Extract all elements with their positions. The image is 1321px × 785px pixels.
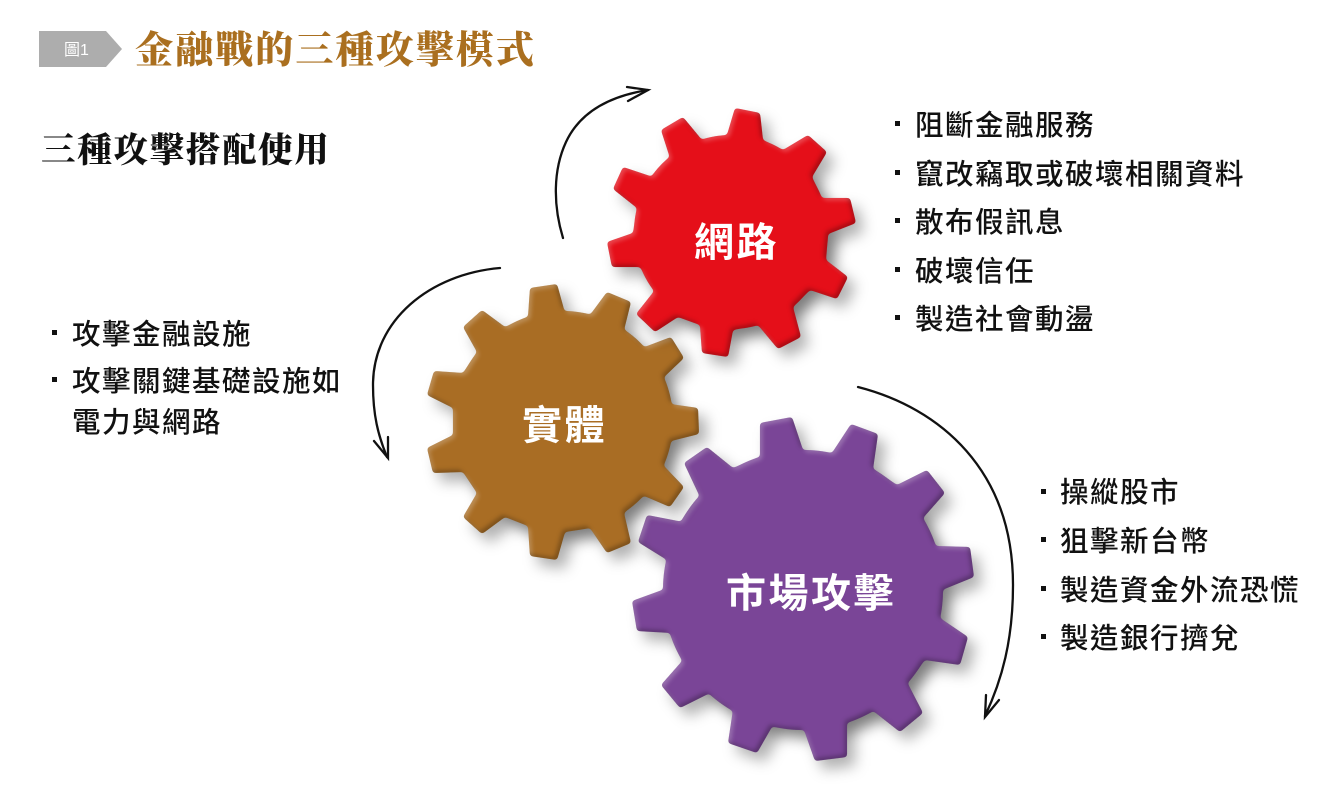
arrow: 網路 to 市場攻擊 <box>858 387 1013 717</box>
list: 實體: 攻擊關鍵基礎設施如 <box>72 366 342 398</box>
list: 網路: 阻斷金融服務 <box>915 110 1095 142</box>
list: 實體: 攻擊金融設施 <box>72 319 252 351</box>
list: 網路 <box>895 110 1245 336</box>
gear: 實體 <box>427 284 707 569</box>
title: 金融戰的三種攻擊模式 <box>135 30 536 72</box>
list: 市場攻擊: 狙擊新台幣 <box>1060 526 1210 558</box>
gear: 網路: 網路 <box>694 221 779 265</box>
list: 市場攻擊: 製造銀行擠兌 <box>1060 623 1240 655</box>
gear: 市場攻擊 <box>632 417 982 770</box>
list: 網路: 製造社會動盪 <box>915 304 1095 336</box>
figure tag: 圖1 <box>39 31 122 67</box>
gear: 市場攻擊: 市場攻擊 <box>726 572 896 616</box>
list: 網路: 散布假訊息 <box>915 207 1065 239</box>
figure tag: 圖1: 圖1 <box>64 42 89 59</box>
list: 網路: 破壞信任 <box>915 256 1035 288</box>
list: 市場攻擊: 操縱股市 <box>1060 477 1180 509</box>
arrow: 實體 to 網路 <box>556 87 648 238</box>
list: 網路: 竄改竊取或破壞相關資料 <box>915 159 1245 191</box>
subtitle: 三種攻擊搭配使用 <box>41 132 331 170</box>
list: 實體: 電力與網路 <box>72 407 222 439</box>
list: 市場攻擊: 製造資金外流恐慌 <box>1060 575 1300 607</box>
list: 市場攻擊 <box>1041 477 1300 655</box>
arrow: 網路 to 實體 <box>373 268 500 458</box>
gear: 實體: 實體 <box>522 404 607 448</box>
list: 實體 <box>52 319 342 439</box>
gear: 網路 <box>607 108 864 366</box>
